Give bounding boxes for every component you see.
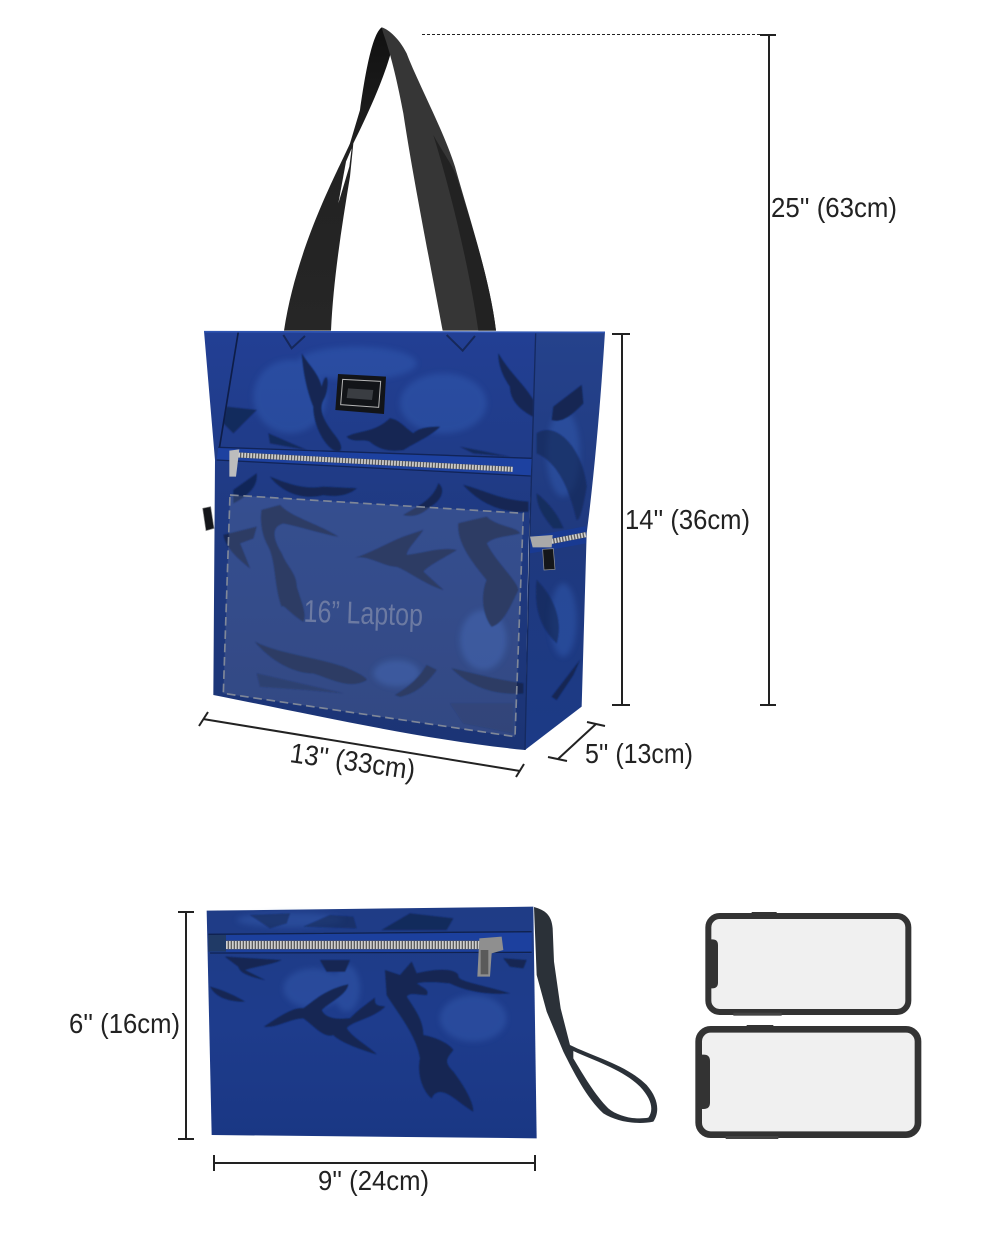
pouch soft highlights bbox=[237, 913, 507, 1042]
soft camouflage highlights bbox=[253, 347, 580, 687]
pouch zipper bbox=[208, 932, 532, 977]
brand badge bbox=[335, 374, 386, 414]
dimension: bag height bbox=[612, 334, 750, 705]
dimension: total height bbox=[422, 34, 897, 705]
bag side panel bbox=[525, 332, 605, 750]
tote bag body bbox=[203, 331, 605, 750]
icon: small phone bbox=[708, 912, 908, 1016]
side pocket zipper bbox=[530, 526, 587, 570]
left zipper pull bbox=[203, 507, 214, 531]
dimension: pouch width: 9'' (24cm) bbox=[318, 1165, 429, 1196]
tote bag handles bbox=[284, 27, 496, 331]
icon: large phone bbox=[698, 1025, 918, 1139]
pouch body bbox=[207, 907, 537, 1138]
laptop size overlay bbox=[223, 495, 523, 737]
zippered pouch bbox=[207, 907, 537, 1138]
dimension: bag depth: 5'' (13cm) bbox=[585, 738, 693, 769]
dimension: bag height: 14'' (36cm) bbox=[625, 504, 750, 535]
dimension: bag width bbox=[199, 712, 524, 785]
dark camouflage pattern bbox=[223, 353, 587, 733]
dimension: bag width: 13'' (33cm) bbox=[288, 737, 417, 785]
pouch camouflage bbox=[210, 913, 527, 1112]
side seam bbox=[525, 333, 536, 750]
pouch wrist strap bbox=[534, 907, 657, 1123]
front pocket zipper bbox=[217, 447, 532, 477]
bag front panel bbox=[204, 331, 537, 750]
front handle bbox=[382, 27, 496, 331]
dimension: bag depth bbox=[548, 722, 693, 769]
back handle bbox=[284, 27, 391, 331]
laptop label: 16” Laptop bbox=[303, 594, 424, 633]
dimension: pouch width bbox=[214, 1155, 535, 1196]
dimension: pouch height bbox=[69, 912, 194, 1139]
strap tabs bbox=[283, 335, 475, 351]
dimension: total height: 25'' (63cm) bbox=[771, 192, 897, 223]
dimension: pouch height: 6'' (16cm) bbox=[69, 1008, 180, 1039]
left gusset fold line bbox=[219, 332, 238, 448]
top hem stitching bbox=[204, 329, 605, 335]
